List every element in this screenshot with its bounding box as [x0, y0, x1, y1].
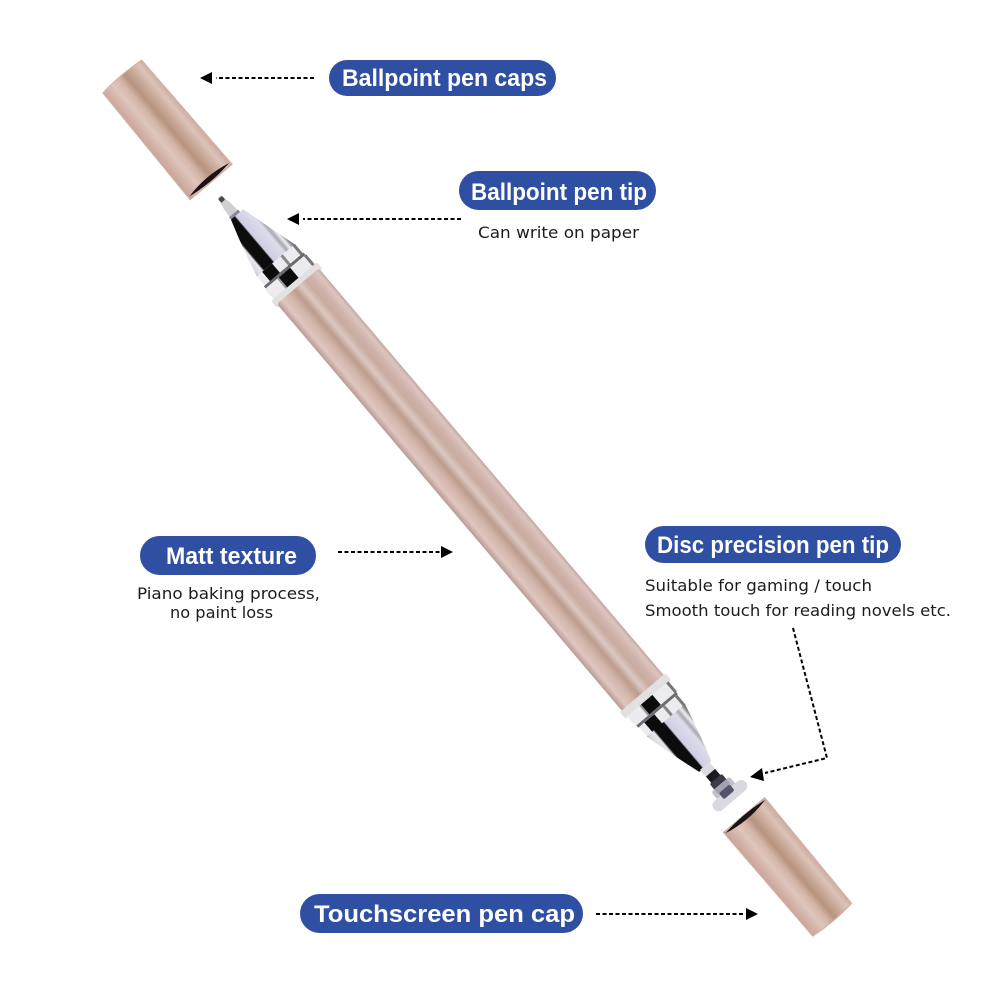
lower checkered rings [627, 681, 687, 738]
text: disc tip description: Suitable for gaming / touch [645, 576, 872, 595]
label: ballpoint pen caps: Ballpoint pen caps [342, 65, 547, 92]
text: can write on paper: Can write on paper [478, 223, 639, 242]
pen barrel [277, 268, 666, 713]
label: matt texture: Matt texture [166, 543, 297, 570]
lower collar [620, 673, 671, 719]
text: disc tip description [645, 576, 951, 620]
label: touchscreen pen cap [300, 894, 583, 933]
lower metal cone [647, 704, 724, 783]
arrow: to ballpoint cap [200, 72, 314, 84]
upper collar [271, 262, 323, 308]
label: ballpoint pen tip: Ballpoint pen tip [471, 179, 647, 206]
text: piano baking process: no paint loss [170, 603, 273, 622]
disc tip [704, 771, 750, 814]
label: touchscreen pen cap: Touchscreen pen cap [314, 901, 575, 928]
disc neck [699, 761, 731, 795]
upper metal cone [218, 198, 296, 277]
arrow: to barrel [338, 546, 453, 558]
text: disc tip description: Smooth touch for reading novels etc. [645, 601, 951, 620]
label: matt texture [140, 536, 316, 575]
label: disc precision pen tip: Disc precision pen tip [657, 532, 889, 559]
label: disc precision pen tip [645, 526, 901, 563]
touchscreen pen cap [723, 798, 854, 938]
upper checkered rings [255, 243, 315, 300]
arrow: to ballpoint tip [287, 213, 461, 225]
text: piano baking process: Piano baking process, [137, 584, 320, 603]
ballpoint pen cap [100, 58, 232, 200]
arrow: to disc tip [750, 628, 827, 781]
arrow: to touchscreen cap [596, 908, 758, 920]
label: ballpoint pen tip [459, 171, 656, 210]
stylus pen [198, 176, 757, 820]
ballpoint tip [215, 193, 241, 220]
text: piano baking process [137, 584, 320, 622]
